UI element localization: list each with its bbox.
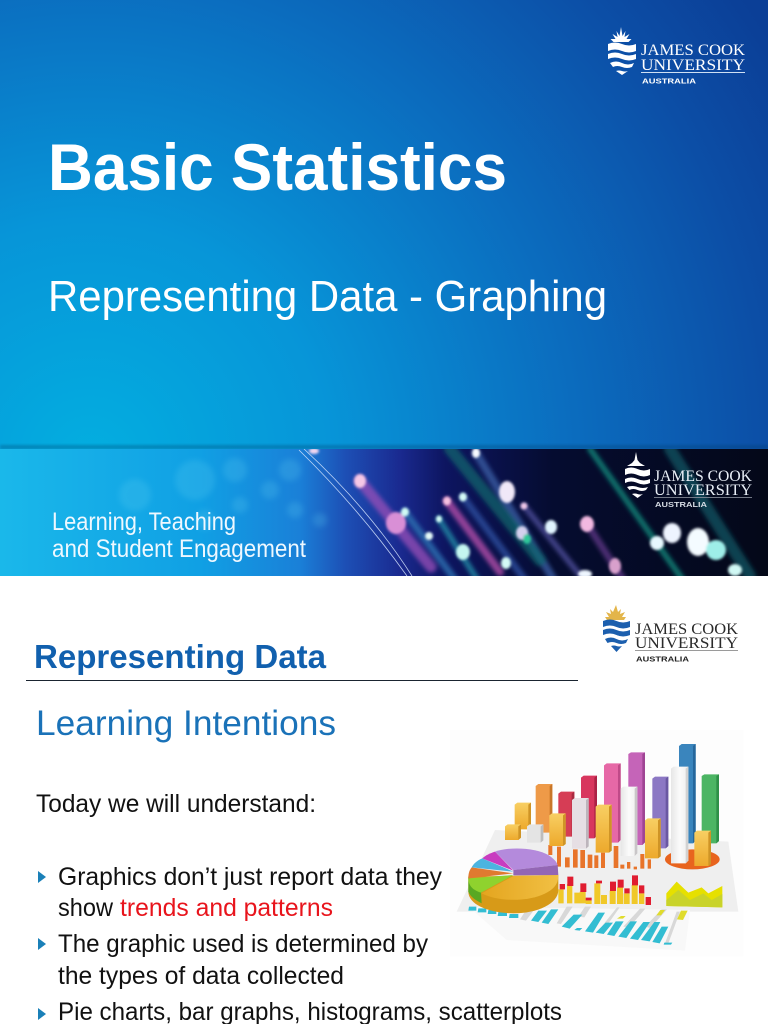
front bars [505,767,711,866]
back bars [515,744,719,848]
lower paper sheet [468,907,690,951]
logo: James Cook University, content slide: AUSTRALIA [636,654,690,664]
logo: James Cook University, banner: UNIVERSITY [654,482,752,499]
red and yellow stacked bars [558,875,651,905]
intro text: Today we will understand: [36,790,316,818]
logo: James Cook University, title slide [608,27,745,86]
logo: James Cook University, title slide: AUSTRALIA [642,76,697,86]
logo: James Cook University, content slide [603,605,738,664]
logo: James Cook University, content slide: JAMES COOK [635,621,738,638]
teal bar strips [468,907,688,945]
bullet list: show [58,894,114,922]
logo: James Cook University, banner: AUSTRALIA [655,502,707,509]
title slide background [0,0,768,449]
bullet list: the types of data collected [58,962,344,990]
subtitle: Representing Data - Graphing [48,272,607,321]
subheading: Learning Intentions: Learning Intentions [36,704,336,743]
bullet list [38,863,562,1024]
yellow area chart [666,882,722,907]
chart illustration [450,730,743,957]
pie chart [468,848,558,913]
heading: Representing Data: Representing Data [34,638,327,675]
banner text: and Student Engagement [52,535,306,563]
orange bar chart [548,845,651,869]
title: Basic Statistics [48,130,507,204]
logo: James Cook University, banner [625,452,752,509]
logo: James Cook University, title slide: UNIVERSITY [641,57,745,74]
banner text [52,508,306,563]
orange ring chart [665,849,720,869]
logo: James Cook University, banner: JAMES COOK [654,468,752,485]
bullet list: trends and patterns [120,894,333,922]
bullet list: The graphic used is determined by [58,930,428,958]
banner text: Learning, Teaching [52,508,236,536]
banner: fibre optic image [0,449,768,576]
image backdrop [450,730,743,957]
logo: James Cook University, content slide: UNIVERSITY [635,635,738,652]
bullet list: Graphics don’t just report data they [58,863,442,891]
logo: James Cook University, title slide: JAMES COOK [641,42,745,59]
paper sheet [457,830,738,912]
